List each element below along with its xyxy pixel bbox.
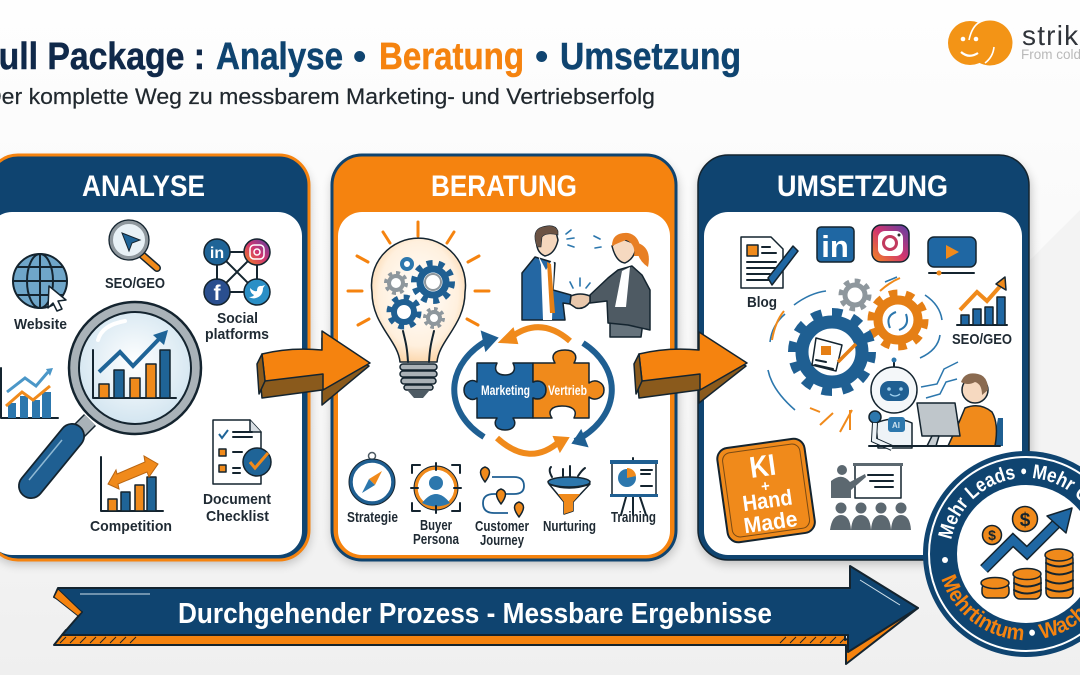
title: • (353, 36, 366, 78)
woman (590, 233, 650, 337)
icon: linkedin: in (821, 229, 849, 264)
label: document checklist: Checklist (206, 508, 269, 525)
arrow: analyse to beratung (257, 331, 370, 405)
icon: presentation audience (830, 463, 911, 530)
subtitle: Der komplette Weg zu messbarem Marketing- und Vertriebserfolg (0, 84, 655, 109)
person (948, 373, 1003, 446)
label: nurturing: Nurturing (543, 518, 596, 535)
label: buyer persona: Buyer (420, 517, 452, 534)
icon: video (928, 237, 976, 276)
man (522, 226, 571, 320)
label: buyer persona (413, 517, 460, 548)
icon: puzzle marketing vertrieb (464, 350, 604, 430)
title: Beratung (379, 36, 524, 78)
label: competition: Competition (90, 518, 172, 535)
title (0, 36, 741, 78)
title: Analyse (216, 36, 343, 78)
heading: umsetzung: UMSETZUNG (777, 170, 948, 203)
label: customer journey (475, 518, 529, 549)
icon: cycle arrows (454, 327, 612, 454)
icon: large magnifier with chart (29, 302, 201, 486)
label: document checklist (203, 491, 271, 525)
icon: document checklist (213, 420, 271, 484)
label: process text: Durchgehender Prozess - Messbare Ergebnisse (178, 598, 772, 630)
icon: globe website (13, 254, 67, 311)
badge: results (923, 451, 1080, 657)
desk (869, 445, 1000, 447)
label: social platforms: Social (217, 310, 258, 327)
icon: coins and growth arrow (981, 506, 1073, 599)
sparks (566, 230, 601, 288)
label: seo geo: SEO/GEO (952, 331, 1012, 348)
icon: compass (349, 452, 395, 505)
icon: light bulb with gears (348, 222, 489, 398)
icon: buyer persona (411, 463, 461, 513)
handshake (570, 294, 590, 308)
label: strategie: Strategie (347, 509, 398, 526)
signal lines (921, 362, 958, 398)
logo text: strik (1022, 20, 1079, 51)
label: social platforms: platforms (205, 326, 269, 343)
panel: beratung (332, 155, 678, 564)
icon: robot and person at computer (869, 358, 1003, 448)
label: buyer persona: Persona (413, 531, 460, 548)
icon: blog document (741, 237, 798, 288)
icon: social network (204, 239, 270, 305)
icon: funnel (548, 466, 590, 514)
panel: analyse (0, 155, 310, 564)
icon: handshake consultants (522, 226, 650, 337)
icon: customer journey (480, 467, 524, 517)
label: document checklist: Document (203, 491, 271, 508)
icon: social network: f (214, 282, 222, 305)
icon: seo magnifier (109, 220, 157, 268)
heading: analyse: ANALYSE (82, 170, 205, 203)
heading: beratung: BERATUNG (431, 170, 577, 203)
label: training: Training (611, 509, 656, 526)
panel: umsetzung (698, 155, 1031, 564)
arrow: process banner (54, 566, 918, 664)
label: customer journey: Customer (475, 518, 529, 535)
badge: ki plus handmade: Made (742, 506, 799, 538)
icon: left growth chart (1, 368, 58, 418)
badge bullet (942, 557, 948, 563)
icon: instagram (872, 225, 909, 262)
monitor (917, 403, 960, 436)
label: marketing: Marketing (481, 383, 530, 398)
icon: competition chart (101, 456, 163, 511)
label: website: Website (14, 316, 67, 333)
icon: coins and growth arrow: $ (988, 527, 996, 543)
logo mark (948, 20, 1012, 66)
icon: gears workflow (768, 277, 942, 432)
label: customer journey: Journey (480, 532, 524, 549)
label: blog: Blog (747, 294, 777, 311)
logo: From cold (1021, 47, 1080, 62)
logo (948, 20, 1080, 66)
badge: ki plus handmade (716, 437, 816, 544)
title: Umsetzung (560, 36, 741, 78)
icon: seo chart (957, 277, 1007, 325)
label: vertrieb: Vertrieb (548, 383, 587, 398)
label: social platforms (205, 310, 269, 343)
icon: training board (610, 458, 658, 515)
icon: social network: in (210, 245, 224, 262)
title: • (535, 36, 548, 78)
badge: ki plus handmade: + (760, 477, 771, 496)
badge: ki plus handmade: Hand (741, 485, 794, 516)
robot: AI (892, 421, 900, 430)
label: seo geo: SEO/GEO (105, 275, 165, 292)
badge: ki plus handmade: KI (748, 449, 778, 485)
icon: coins and growth arrow: $ (1020, 510, 1031, 531)
arrow: beratung to umsetzung (634, 332, 747, 403)
